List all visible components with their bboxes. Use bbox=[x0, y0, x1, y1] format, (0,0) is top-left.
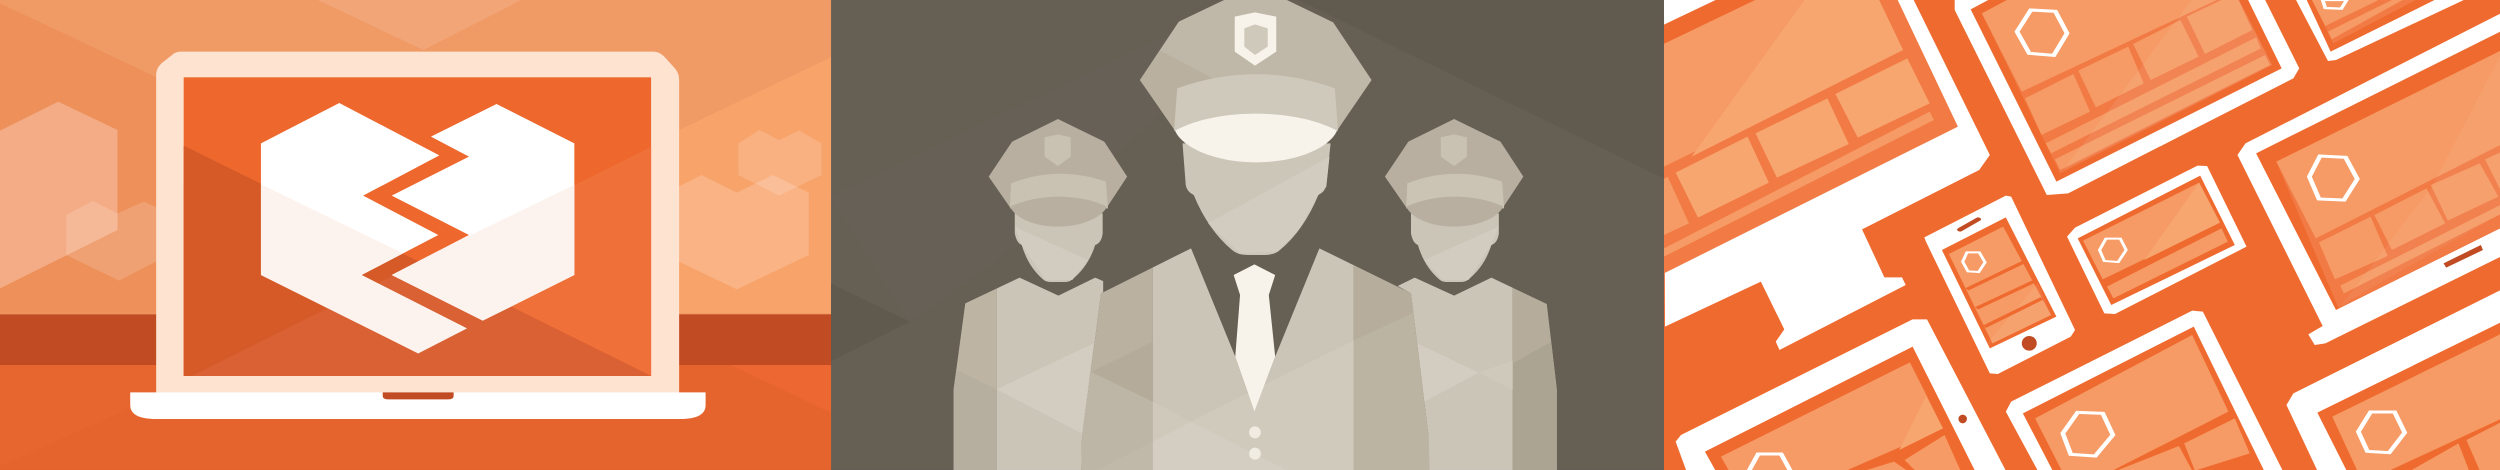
centre buttons bbox=[1249, 426, 1261, 460]
hexagon ring bbox=[2100, 239, 2126, 262]
device: bottom centre tablet bbox=[2006, 311, 2283, 470]
device: desktop monitor bbox=[1664, 0, 1990, 350]
phone speaker bbox=[1960, 219, 1978, 230]
device: top right tablet bbox=[2296, 0, 2464, 61]
right hat band bbox=[1406, 174, 1504, 208]
laptop lid bbox=[156, 52, 679, 393]
laptop base bbox=[130, 392, 706, 419]
panel: responsive devices bbox=[1664, 0, 2500, 470]
hexagons: left cluster bbox=[0, 102, 159, 288]
left badge bbox=[1045, 134, 1071, 166]
left visor bbox=[1010, 197, 1107, 227]
device: laptop right bbox=[2237, 13, 2500, 345]
hexagon ring bbox=[2323, 0, 2347, 9]
laptop bbox=[130, 52, 706, 419]
hexagon ring bbox=[1748, 454, 1792, 470]
centre face bbox=[1183, 143, 1331, 255]
centre hat band bbox=[1174, 74, 1338, 131]
centre badge bbox=[1235, 12, 1276, 66]
officer: centre bbox=[1075, 0, 1433, 470]
panel: three police officers bbox=[831, 0, 1557, 470]
right hat bbox=[1385, 119, 1523, 207]
laptop slot bbox=[2444, 245, 2483, 268]
left body bbox=[954, 278, 1104, 470]
panel: broken heart laptop bbox=[0, 0, 832, 470]
officer: left bbox=[937, 119, 1127, 470]
right visor bbox=[1406, 197, 1503, 227]
right body bbox=[1394, 267, 1561, 470]
hexagon ring bbox=[2358, 412, 2405, 453]
centre hat bbox=[1140, 0, 1372, 131]
device: top tablet bbox=[1955, 0, 2299, 195]
hexagon ring bbox=[2063, 412, 2113, 456]
centre body bbox=[1075, 247, 1433, 470]
left hat band bbox=[1010, 174, 1108, 208]
hexagon ring bbox=[2017, 10, 2067, 55]
right badge bbox=[1441, 134, 1467, 166]
background: sky and floor bbox=[0, 0, 832, 470]
hexagon ring bbox=[1963, 252, 1985, 272]
background bbox=[1664, 0, 2500, 470]
centre visor bbox=[1175, 114, 1337, 162]
left face bbox=[1015, 213, 1103, 282]
device: bottom left tablet bbox=[1676, 319, 2006, 470]
device: bottom right tablet bbox=[2286, 289, 2500, 470]
centre tie bbox=[1234, 264, 1275, 412]
right face bbox=[1411, 213, 1499, 282]
hexagons: right cluster bbox=[672, 130, 822, 289]
hexagon ring bbox=[2309, 156, 2357, 200]
device: small tablet bbox=[2067, 166, 2247, 314]
phone button bbox=[2022, 336, 2037, 351]
background facets bbox=[831, 0, 832, 470]
laptop screen bbox=[184, 77, 651, 376]
officer: right bbox=[1385, 119, 1561, 470]
left hat bbox=[989, 119, 1127, 207]
laptop notch bbox=[383, 392, 454, 399]
device: phone bbox=[1924, 196, 2075, 374]
tablet camera bbox=[1958, 415, 1967, 423]
broken heart icon bbox=[261, 103, 574, 353]
